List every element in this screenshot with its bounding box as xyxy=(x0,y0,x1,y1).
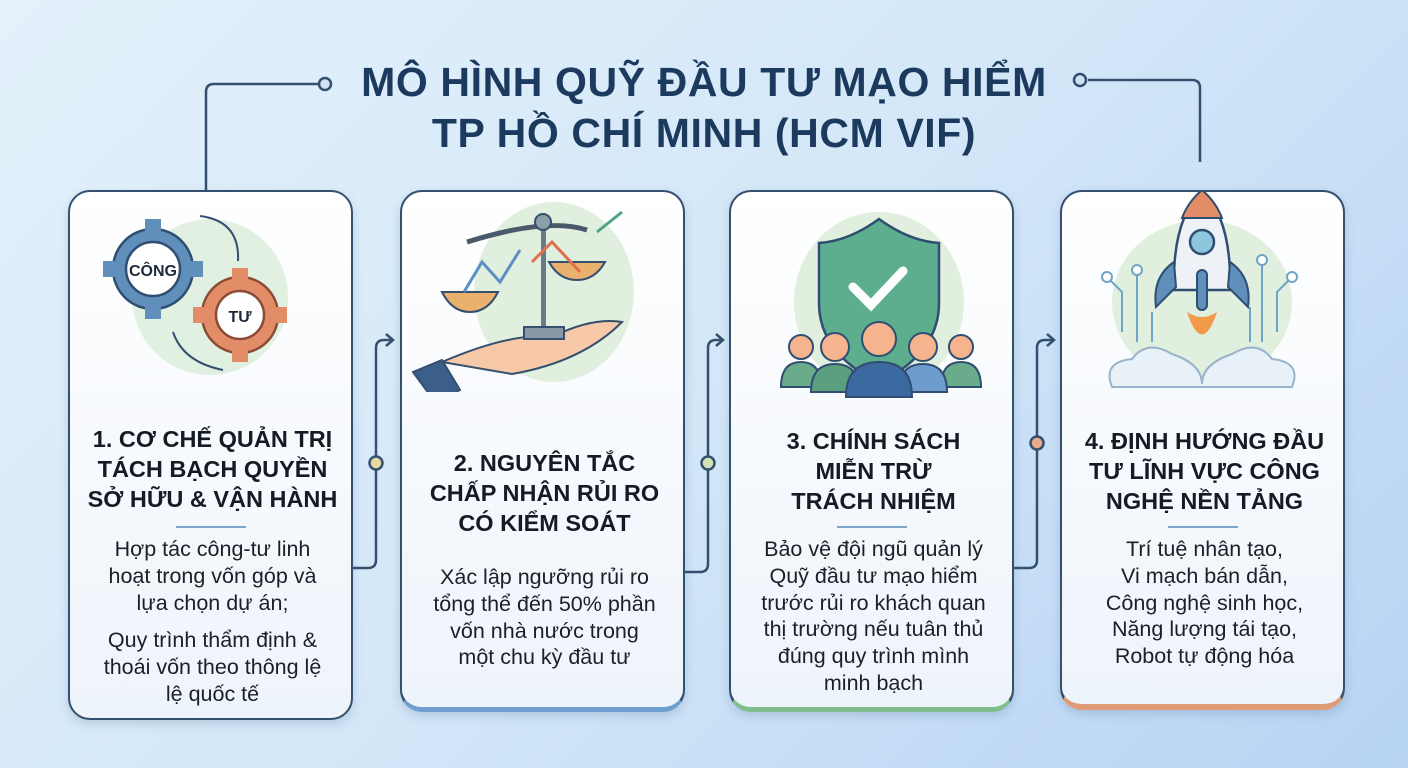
body 2: vốn nhà nước trong xyxy=(450,619,639,643)
heading 1: SỞ HỮU & VẬN HÀNH xyxy=(88,486,337,512)
body 1: hoạt trong vốn góp và xyxy=(108,564,316,588)
heading 4: TƯ LĨNH VỰC CÔNG xyxy=(1089,458,1320,484)
icon: gears: CÔNG xyxy=(129,261,177,280)
body 3: minh bạch xyxy=(824,671,923,695)
body 4: Năng lượng tái tạo, xyxy=(1112,617,1297,641)
body 3 xyxy=(761,537,986,695)
body 2 xyxy=(433,565,656,669)
heading 2: CHẤP NHẬN RỦI RO xyxy=(430,480,659,506)
panel: card 2 risk xyxy=(400,190,685,712)
body 1: Hợp tác công-tư linh xyxy=(115,537,310,561)
title: MÔ HÌNH QUỸ ĐẦU TƯ MẠO HIỂM xyxy=(361,59,1047,105)
icon: rocket xyxy=(1101,192,1298,388)
body 3: đúng quy trình mình xyxy=(778,644,969,668)
body 3: Bảo vệ đội ngũ quản lý xyxy=(764,537,983,561)
title: TP HỒ CHÍ MINH (HCM VIF) xyxy=(432,110,976,156)
body 2: Xác lập ngưỡng rủi ro xyxy=(440,565,649,589)
body 4: Robot tự động hóa xyxy=(1115,644,1294,668)
title xyxy=(361,59,1047,156)
heading 3 xyxy=(787,428,960,514)
body 2: một chu kỳ đầu tư xyxy=(458,645,631,669)
heading 1 xyxy=(88,426,337,512)
body 1: lệ quốc tế xyxy=(166,682,259,706)
body 4: Trí tuệ nhân tạo, xyxy=(1126,537,1283,561)
heading 2: CÓ KIỂM SOÁT xyxy=(458,510,631,536)
heading 2 xyxy=(430,450,659,536)
icon: gears: TƯ xyxy=(228,309,252,326)
panel: card 1 governance xyxy=(68,190,353,720)
heading 1: 1. CƠ CHẾ QUẢN TRỊ xyxy=(93,426,332,452)
body 4: Công nghệ sinh học, xyxy=(1106,591,1303,615)
heading 4 xyxy=(1085,428,1324,514)
panel: card 4 tech xyxy=(1060,190,1345,710)
body 1: thoái vốn theo thông lệ xyxy=(104,655,321,679)
body 4: Vi mạch bán dẫn, xyxy=(1121,564,1288,588)
body 2: tổng thể đến 50% phần xyxy=(433,592,656,616)
heading 4: NGHỆ NỀN TẢNG xyxy=(1106,488,1303,514)
body 1 xyxy=(104,537,321,706)
body 3: trước rủi ro khách quan xyxy=(761,591,986,615)
icon: scale on hand xyxy=(412,202,634,392)
heading 4: 4. ĐỊNH HƯỚNG ĐẦU xyxy=(1085,428,1324,454)
body 4 xyxy=(1106,537,1303,668)
icon: shield and people xyxy=(780,212,982,398)
heading 2: 2. NGUYÊN TẮC xyxy=(454,450,635,476)
heading 1: TÁCH BẠCH QUYỀN xyxy=(98,456,327,482)
heading 3: MIỄN TRỪ xyxy=(815,458,932,484)
body 1: lựa chọn dự án; Quy trình thẩm định & xyxy=(108,591,317,652)
icon: gears xyxy=(103,215,288,375)
body 3: thị trường nếu tuân thủ xyxy=(764,617,983,641)
heading 3: 3. CHÍNH SÁCH xyxy=(787,428,960,454)
panel: card 3 liability exemption xyxy=(729,190,1014,712)
body 3: Quỹ đầu tư mạo hiểm xyxy=(770,564,978,588)
heading 3: TRÁCH NHIỆM xyxy=(791,488,956,514)
